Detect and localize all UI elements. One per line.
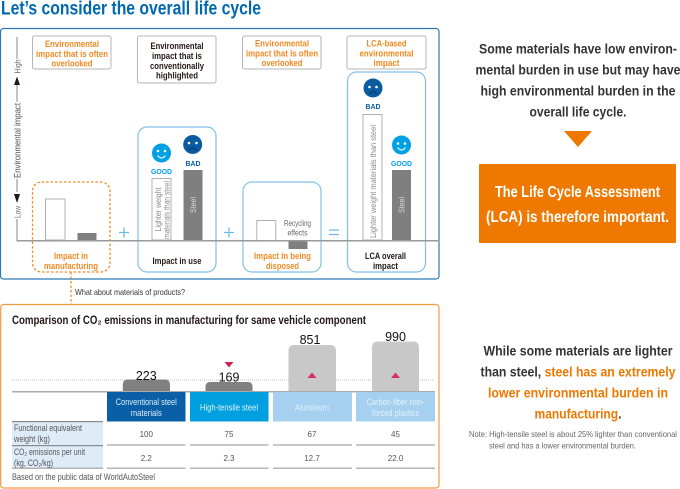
- text block: steel burden: [480, 344, 676, 422]
- label: recycling effects: [284, 219, 311, 238]
- group: LCA overall impact: [348, 72, 426, 272]
- bar: steel in use: Steel: [188, 197, 198, 213]
- heading box: manufacturing overlooked: impact that is often: [36, 49, 108, 59]
- axis: environmental impact: High: [14, 60, 22, 74]
- label: impact in being disposed: [254, 251, 311, 271]
- heading box: conventionally highlighted: Environmental: [150, 41, 204, 51]
- axis: environmental impact: [12, 37, 22, 240]
- heading box: manufacturing overlooked: overlooked: [52, 58, 92, 68]
- heading box: conventionally highlighted: highlighted: [156, 70, 198, 80]
- column header: conventional steel: materials: [131, 408, 162, 419]
- bar chart: 851: [300, 333, 320, 347]
- heading box: manufacturing overlooked: Environmental: [45, 39, 99, 49]
- bar: aluminum: [288, 345, 336, 391]
- axis: environmental impact: Environmental impact: [12, 103, 22, 178]
- text block: low burden in use: overall life cycle.: [530, 104, 626, 120]
- row values: 2.2: [141, 454, 152, 463]
- bar chart: 990: [385, 330, 406, 344]
- text block: steel burden: manufacturing.: [534, 406, 622, 422]
- label: bad: BAD: [366, 102, 381, 111]
- bar chart: [12, 330, 435, 392]
- row values: 67: [308, 430, 317, 439]
- symbol: plus: [224, 228, 234, 238]
- note: steel and has a lower environmental burden.: [489, 440, 636, 450]
- row values: 45: [391, 430, 400, 439]
- icon: good face: [392, 136, 411, 154]
- panel heading: Comparison of CO₂ emissions in manufacturing for same vehicle component: [12, 315, 366, 327]
- label: impact in manufacturing: Impact in: [54, 251, 88, 261]
- label: what about materials: What about materials of products?: [75, 287, 185, 297]
- heading box: conventionally highlighted: [138, 36, 216, 83]
- column header: carbon fiber: Carbon fiber rein-: [366, 397, 424, 408]
- bar: carbon fiber: [372, 342, 419, 391]
- bar chart: 223: [136, 369, 157, 383]
- bar: lighter materials in use: Lighter weight: [154, 187, 163, 232]
- bar chart: 169: [219, 370, 239, 384]
- baseline: [16, 240, 438, 242]
- group: impact in use: [138, 127, 216, 272]
- column header: aluminum: [273, 392, 352, 422]
- bar: steel overall: Steel: [396, 197, 406, 213]
- row labels: weight (kg): [13, 434, 50, 444]
- bar: steel overall: [392, 170, 411, 240]
- row labels: [12, 421, 103, 469]
- axis: environmental impact: Low: [14, 206, 22, 218]
- bar: steel manufacturing: [78, 233, 96, 240]
- row labels: CO₂ emissions per unit: [14, 447, 85, 457]
- bar: steel recycling effect: [288, 241, 308, 249]
- heading box: disposal overlooked: impact that is often: [246, 48, 318, 58]
- heading box: disposal overlooked: overlooked: [262, 58, 302, 68]
- row labels: Functional equivalent: [14, 423, 82, 433]
- row labels: (kg, CO₂/kg): [14, 458, 53, 468]
- label: LCA overall impact: LCA overall: [365, 251, 406, 261]
- row values: 75: [225, 430, 234, 439]
- text block: steel burden: lower environmental burden in: [488, 386, 668, 400]
- symbol: plus: [119, 228, 129, 238]
- heading box: LCA-based: environmental: [360, 48, 414, 58]
- connector: dashed link: [70, 272, 72, 304]
- heading box: LCA-based: [347, 36, 426, 69]
- label: impact in manufacturing: [44, 251, 98, 271]
- arrow: down: [564, 131, 592, 147]
- bar: conventional steel: [123, 380, 170, 391]
- heading box: LCA-based: impact: [374, 58, 400, 68]
- column header: high-tensile steel: High-tensile steel: [200, 402, 258, 414]
- column header: high-tensile steel: [190, 392, 268, 422]
- callout: LCA importance: [479, 164, 676, 243]
- heading box: manufacturing overlooked: [32, 36, 111, 69]
- text block: low burden in use: [476, 42, 680, 120]
- column header: carbon fiber: [356, 392, 435, 422]
- bar: lighter materials in use: materials than steel: [162, 181, 172, 239]
- group: impact in manufacturing: [32, 182, 110, 272]
- row values: 12.7: [304, 454, 320, 463]
- label: recycling effects: effects: [288, 228, 308, 238]
- row values: 100: [140, 430, 154, 439]
- bar: lighter materials in use: [152, 178, 172, 240]
- label: good: GOOD: [391, 159, 413, 168]
- label: bad: BAD: [186, 159, 201, 168]
- label: impact in being disposed: disposed: [266, 261, 299, 271]
- note: [469, 429, 677, 450]
- icon: good face: [152, 144, 171, 162]
- bar: lighter materials overall: Lighter weight materials than steel: [369, 125, 378, 238]
- column header: conventional steel: [107, 392, 186, 422]
- bar: lighter materials manufacturing: [46, 199, 65, 240]
- label: LCA overall impact: [365, 251, 406, 271]
- heading box: conventionally highlighted: impact that is: [152, 51, 202, 61]
- source note: Based on the public data of WorldAutoSteel: [12, 472, 155, 482]
- label: LCA overall impact: impact: [373, 261, 398, 271]
- symbol: equals: [329, 230, 339, 234]
- bar: lighter materials overall: [363, 114, 382, 240]
- column header: carbon fiber: forced plastics: [372, 408, 419, 419]
- row values: 2.3: [223, 454, 235, 463]
- column header: conventional steel: Conventional steel: [116, 397, 177, 408]
- bar: steel in use: [184, 170, 202, 240]
- table: [12, 392, 435, 469]
- heading box: disposal overlooked: Environmental: [255, 38, 309, 48]
- label: impact in being disposed: Impact in being: [254, 251, 311, 261]
- column header: aluminum: Aluminum: [295, 402, 329, 414]
- panel: CO2 comparison: [1, 304, 439, 488]
- row values: 22.0: [388, 454, 404, 463]
- group: impact in disposal: [243, 182, 321, 272]
- heading box: disposal overlooked: [242, 36, 321, 69]
- icon: bad face: [364, 78, 382, 98]
- icon: bad face: [183, 135, 202, 154]
- bar: lighter materials disposal: [257, 220, 276, 240]
- label: good: GOOD: [151, 167, 173, 176]
- label: impact in use: Impact in use: [152, 256, 202, 266]
- heading box: LCA-based: LCA-based: [366, 38, 406, 48]
- bar: high-tensile steel: [206, 382, 252, 391]
- heading box: conventionally highlighted: conventionally: [150, 61, 204, 71]
- row values: [107, 430, 435, 468]
- label: impact in manufacturing: manufacturing: [44, 261, 98, 271]
- label: recycling effects: Recycling: [284, 219, 311, 228]
